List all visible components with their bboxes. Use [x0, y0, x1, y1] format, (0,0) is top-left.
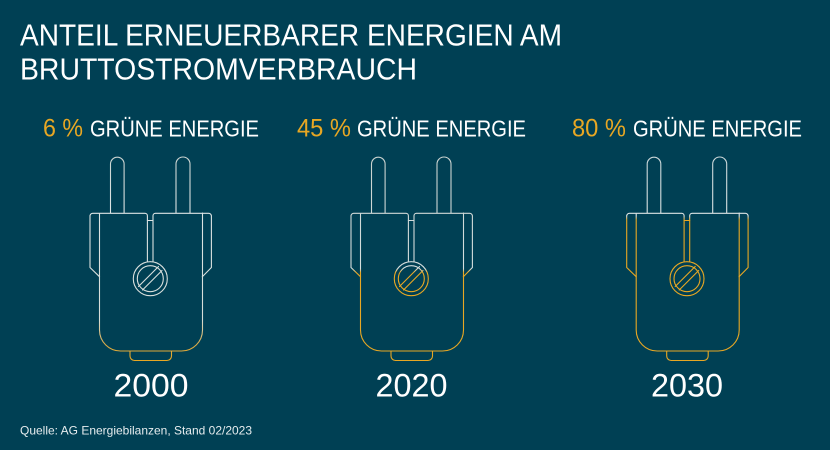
title: BRUTTOSTROMVERBRAUCH [20, 52, 417, 86]
label: 80 % grüne Energie: GRÜNE ENERGIE [633, 116, 802, 142]
label: 6 % grüne Energie: 6 % [43, 114, 83, 142]
icon: plug 2000 [90, 157, 211, 360]
label: 45 % grüne Energie: 45 % [297, 114, 351, 142]
year: 2030: 2030 [651, 368, 723, 404]
panel: 2000 [43, 114, 259, 404]
icon: plug 2030 [627, 157, 748, 360]
panel: 2020 [297, 114, 526, 404]
icon: plug 2020 [351, 157, 472, 360]
year: 2000: 2000 [114, 368, 188, 404]
source note: Quelle: AG Energiebilanzen, Stand 02/2023 [20, 424, 252, 438]
label: 6 % grüne Energie: GRÜNE ENERGIE [90, 116, 259, 142]
label: 45 % grüne Energie [297, 114, 526, 142]
label: 45 % grüne Energie: GRÜNE ENERGIE [357, 116, 526, 142]
label: 80 % grüne Energie [572, 114, 802, 142]
label: 6 % grüne Energie [43, 114, 259, 142]
year: 2020: 2020 [376, 368, 448, 404]
title: ANTEIL ERNEUERBARER ENERGIEN AM [20, 18, 562, 52]
label: 80 % grüne Energie: 80 % [572, 114, 626, 142]
title [20, 18, 562, 86]
panel: 2030 [572, 114, 802, 404]
